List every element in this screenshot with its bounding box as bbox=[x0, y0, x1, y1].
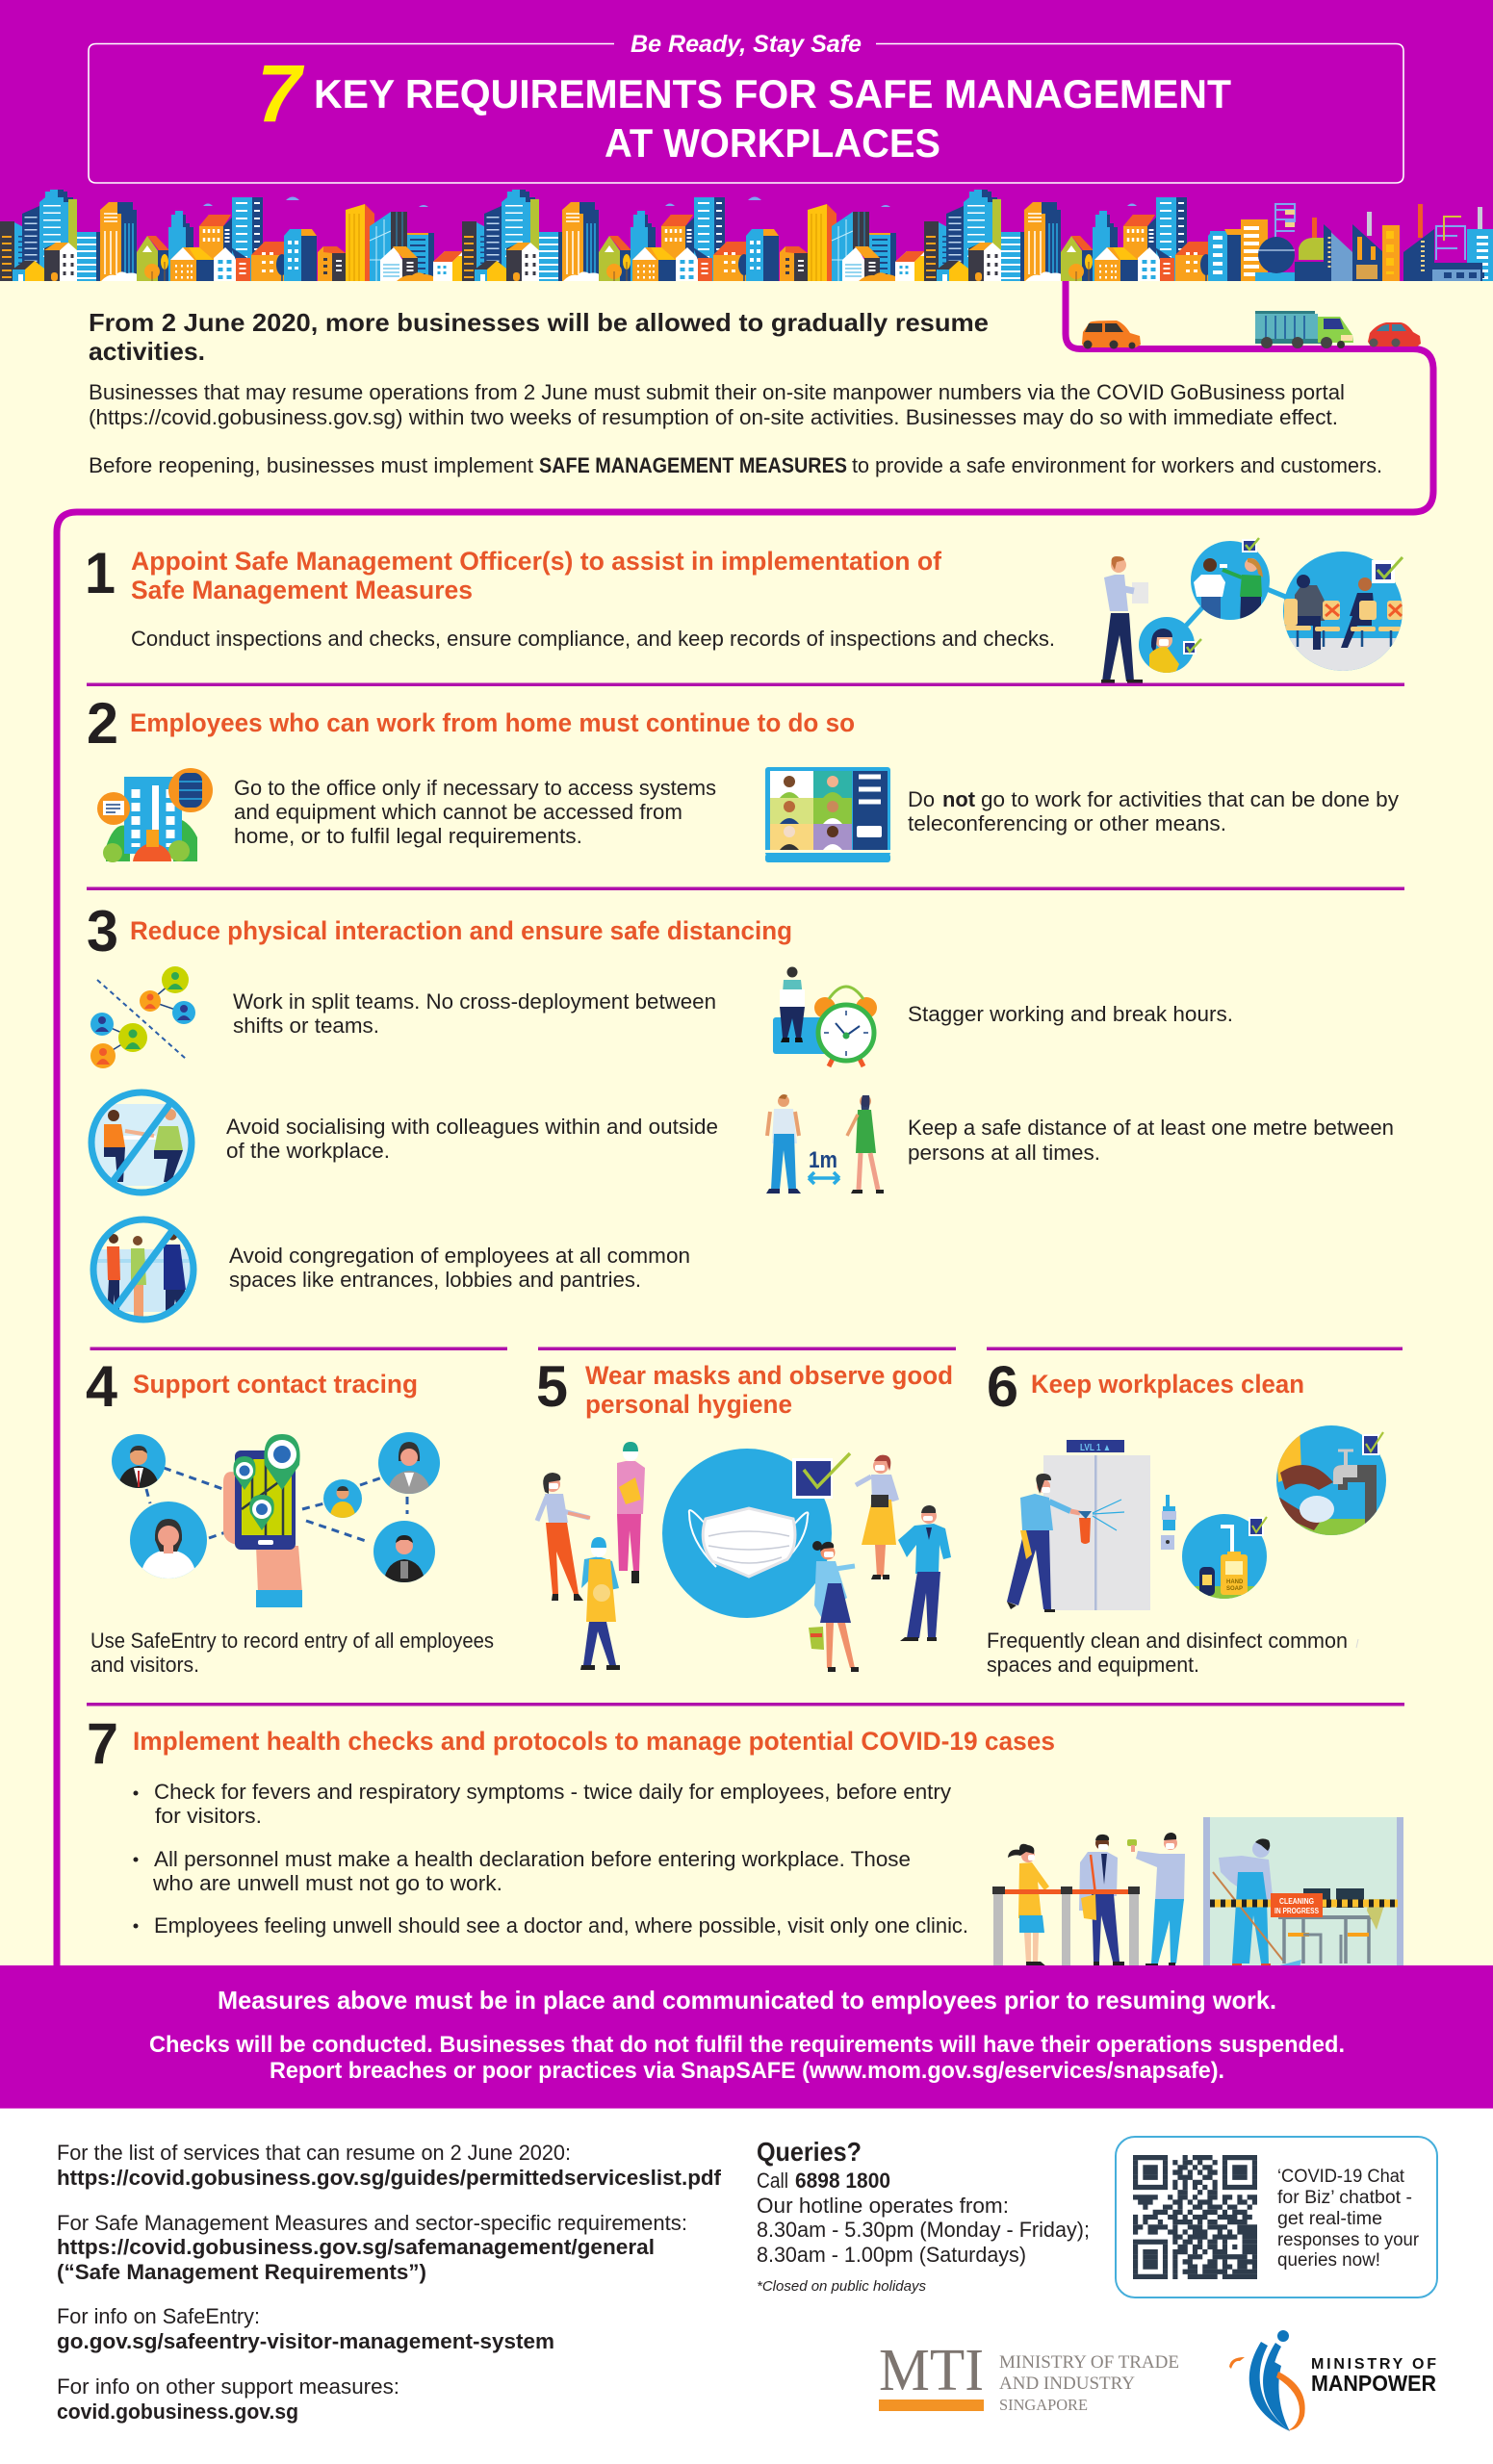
bullet list: for visitors. bbox=[155, 1804, 262, 1828]
intro text: SAFE MANAGEMENT MEASURES bbox=[539, 453, 847, 477]
person pink uniform bbox=[617, 1442, 645, 1583]
lift sign bbox=[1067, 1440, 1124, 1453]
body 2 right: Do bbox=[908, 787, 935, 811]
queries block: 8.30am - 5.30pm (Monday - Friday); bbox=[757, 2218, 1090, 2242]
truck bbox=[1255, 311, 1353, 348]
section 4: contact tracing bbox=[86, 1354, 494, 1677]
footer links: https://covid.gobusiness.gov.sg/guides/permittedserviceslist.pdf bbox=[57, 2166, 722, 2190]
body 3d: Keep a safe distance of at least one metre between bbox=[908, 1116, 1394, 1140]
section 3: safe distancing bbox=[87, 899, 1394, 1320]
illustration: mask and people bbox=[537, 1442, 951, 1672]
woman bbox=[847, 1095, 884, 1194]
red car bbox=[1368, 322, 1421, 346]
intro text: Businesses that may resume operations from 2 June must submit their on-site manpower numbers via the COVID GoBusiness portal bbox=[89, 380, 1345, 404]
logo: MTI: SINGAPORE bbox=[999, 2396, 1088, 2414]
logo: MTI: MINISTRY OF TRADE bbox=[999, 2352, 1179, 2373]
chatbot text: get real-time bbox=[1277, 2209, 1382, 2229]
section 7: health checks bbox=[87, 1711, 1403, 1969]
chatbot text: responses to your bbox=[1277, 2230, 1420, 2250]
orange van bbox=[1082, 321, 1141, 348]
closing banner bbox=[0, 1965, 1493, 2108]
body 2 left bbox=[234, 776, 716, 848]
cleaner bbox=[1007, 1474, 1080, 1612]
body 2 right: teleconferencing or other means. bbox=[908, 811, 1226, 835]
body 3b: Stagger working and break hours. bbox=[908, 1002, 1233, 1026]
icon: one metre distance bbox=[766, 1094, 884, 1194]
hand washing circle bbox=[1276, 1425, 1386, 1535]
logo: MTI bbox=[879, 2338, 1179, 2414]
person left bbox=[537, 1473, 590, 1601]
logo: Ministry of Manpower: MINISTRY OF bbox=[1311, 2356, 1436, 2373]
barrier posts bbox=[992, 1886, 1140, 1966]
body 2 right bbox=[908, 787, 1399, 835]
soap circle bbox=[1182, 1514, 1268, 1599]
bullet list: All personnel must make a health declaration before entering workplace. Those bbox=[154, 1847, 911, 1871]
man with bag bbox=[1079, 1835, 1124, 1965]
body 6: spaces and equipment. bbox=[987, 1653, 1199, 1677]
icon: qr code bbox=[1133, 2158, 1257, 2276]
number 7: 7 bbox=[87, 1711, 118, 1776]
section 6: clean workplaces bbox=[987, 1354, 1391, 1677]
heading 1: Safe Management Measures bbox=[131, 576, 473, 604]
cleaning room bbox=[1203, 1817, 1403, 1969]
title number 7: 7 bbox=[257, 48, 304, 139]
body 3e: Avoid congregation of employees at all common bbox=[229, 1244, 690, 1268]
footer links: For info on other support measures: bbox=[57, 2374, 399, 2399]
chatbot text bbox=[1277, 2167, 1420, 2271]
heading 1 bbox=[131, 547, 942, 604]
section 5 divider bbox=[538, 1348, 956, 1350]
banner line 1: Measures above must be in place and communicated to employees prior to resuming work. bbox=[218, 1986, 1276, 2015]
banner lines 2 and 3: Report breaches or poor practices via SnapSAFE (www.mom.gov.sg/eservices/snapsafe). bbox=[270, 2058, 1224, 2084]
person front with bag bbox=[809, 1541, 859, 1672]
heading 1: Appoint Safe Management Officer(s) to assist in implementation of bbox=[131, 547, 942, 576]
queries block: *Closed on public holidays bbox=[757, 2278, 926, 2295]
body 3c bbox=[226, 1115, 718, 1163]
logo: Ministry of Manpower bbox=[1229, 2330, 1436, 2431]
bullet list bbox=[133, 1780, 968, 1938]
heading 2: Employees who can work from home must continue to do so bbox=[130, 708, 855, 737]
illustration: queue and temperature check bbox=[992, 1817, 1403, 1969]
body 4: Use SafeEntry to record entry of all employees bbox=[90, 1629, 494, 1653]
heading 3: Reduce physical interaction and ensure safe distancing bbox=[130, 916, 792, 945]
heading 6: Keep workplaces clean bbox=[1031, 1370, 1304, 1399]
number 2: 2 bbox=[87, 691, 118, 756]
queries block bbox=[757, 2137, 1090, 2295]
spray bottle bbox=[1078, 1500, 1124, 1544]
intro heading: From 2 June 2020, more businesses will be allowed to gradually resume bbox=[89, 308, 989, 337]
number 4: 4 bbox=[86, 1354, 118, 1419]
section 6 divider bbox=[987, 1348, 1403, 1350]
title: KEY REQUIREMENTS FOR SAFE MANAGEMENT bbox=[314, 71, 1231, 116]
intro heading bbox=[89, 308, 989, 366]
heading 5: personal hygiene bbox=[585, 1390, 792, 1419]
body 2 left: and equipment which cannot be accessed from bbox=[234, 800, 682, 824]
cleaning sign bbox=[1271, 1893, 1323, 1917]
person suit right bbox=[898, 1505, 951, 1641]
icon: no socialising bbox=[89, 1092, 197, 1193]
section 4 divider bbox=[90, 1348, 507, 1350]
heading 4: Support contact tracing bbox=[133, 1370, 418, 1399]
body 2 left: Go to the office only if necessary to access systems bbox=[234, 776, 716, 800]
queries block: Queries? bbox=[757, 2137, 862, 2167]
logo: MTI: MTI bbox=[879, 2338, 984, 2403]
heading 7: Implement health checks and protocols to manage potential COVID-19 cases bbox=[133, 1727, 1055, 1756]
chatbot box bbox=[1116, 2137, 1437, 2297]
footer links: (“Safe Management Requirements”) bbox=[57, 2260, 426, 2284]
number 3: 3 bbox=[87, 899, 118, 963]
intro text bbox=[89, 380, 1382, 477]
title frame bbox=[89, 44, 1403, 183]
number 5: 5 bbox=[536, 1354, 568, 1419]
man with thermometer bbox=[1127, 1833, 1185, 1966]
body 2 right: not bbox=[942, 787, 976, 811]
icon: no congregation bbox=[89, 1219, 197, 1320]
chatbot text: for Biz’ chatbot - bbox=[1277, 2188, 1412, 2208]
divider 1 bbox=[87, 683, 1404, 686]
body 3a bbox=[233, 989, 716, 1038]
person skirt right bbox=[856, 1455, 899, 1579]
footer links: For Safe Management Measures and sector-specific requirements: bbox=[57, 2211, 687, 2235]
cleaning sign: IN PROGRESS bbox=[1274, 1907, 1320, 1915]
body 3e bbox=[229, 1244, 690, 1292]
footer links: For the list of services that can resume on 2 June 2020: bbox=[57, 2141, 571, 2165]
bullet list: Employees feeling unwell should see a doctor and, where possible, visit only one clinic. bbox=[154, 1913, 968, 1938]
intro text: to provide a safe environment for workers and customers. bbox=[852, 453, 1382, 477]
illustration: officer inspecting bbox=[1101, 538, 1405, 684]
icon: video conference laptop bbox=[765, 767, 890, 862]
hand holding phone bbox=[223, 1434, 302, 1607]
icon: worker and alarm clock bbox=[773, 966, 877, 1066]
arrow bbox=[809, 1172, 839, 1184]
banner lines 2 and 3 bbox=[149, 2032, 1345, 2084]
body 6: Frequently clean and disinfect common bbox=[987, 1629, 1348, 1653]
body 6 bbox=[987, 1629, 1358, 1677]
soap circle: SOAP bbox=[1226, 1586, 1243, 1592]
heading 5 bbox=[585, 1361, 953, 1419]
heading 5: Wear masks and observe good bbox=[585, 1361, 953, 1390]
label 1m: 1m bbox=[809, 1147, 837, 1173]
intro text: Before reopening, businesses must implement bbox=[89, 453, 533, 477]
body 4 bbox=[90, 1629, 494, 1677]
banner lines 2 and 3: Checks will be conducted. Businesses that do not fulfil the requirements will have their operations suspended. bbox=[149, 2032, 1345, 2058]
divider 3 bbox=[87, 1703, 1404, 1706]
body 3e: spaces like entrances, lobbies and pantries. bbox=[229, 1268, 641, 1292]
body 2 right: go to work for activities that can be done by bbox=[981, 787, 1399, 811]
number 6: 6 bbox=[987, 1354, 1018, 1419]
man bbox=[766, 1094, 801, 1194]
footer links bbox=[57, 2141, 722, 2424]
body 3c: Avoid socialising with colleagues within and outside bbox=[226, 1115, 718, 1139]
chatbot text: ‘COVID-19 Chat bbox=[1277, 2167, 1405, 2187]
magenta road line bbox=[57, 281, 1433, 1965]
divider 2 bbox=[87, 887, 1404, 890]
section 5: masks bbox=[536, 1354, 953, 1672]
logo: MTI: AND INDUSTRY bbox=[999, 2374, 1135, 2394]
illustration: contact tracing network bbox=[112, 1432, 440, 1607]
check box bbox=[792, 1453, 850, 1499]
title bbox=[314, 71, 1231, 166]
lift door bbox=[1043, 1455, 1150, 1610]
logo: Ministry of Manpower: MANPOWER bbox=[1311, 2371, 1436, 2396]
body 3a: Work in split teams. No cross-deployment between bbox=[233, 989, 716, 1014]
body 3d bbox=[908, 1116, 1394, 1165]
vehicles on road bbox=[1082, 311, 1421, 348]
queries block: 6898 1800 bbox=[795, 2169, 890, 2193]
bullet list: Check for fevers and respiratory symptoms - twice daily for employees, before entry bbox=[154, 1780, 951, 1804]
body 3a: shifts or teams. bbox=[233, 1014, 379, 1038]
body 4: and visitors. bbox=[90, 1653, 199, 1677]
body 2 left: home, or to fulfil legal requirements. bbox=[234, 824, 582, 848]
person apron bbox=[580, 1537, 620, 1670]
section 2: work from home bbox=[87, 691, 1399, 862]
section 1: safe management officer bbox=[85, 538, 1405, 684]
body 3c: of the workplace. bbox=[226, 1139, 390, 1163]
number 1: 1 bbox=[85, 541, 116, 605]
body 1: Conduct inspections and checks, ensure compliance, and keep records of inspections and checks. bbox=[131, 627, 1055, 651]
bullet list: who are unwell must not go to work. bbox=[152, 1871, 502, 1895]
queries block: 8.30am - 1.00pm (Saturdays) bbox=[757, 2243, 1026, 2267]
woman in queue bbox=[1008, 1844, 1049, 1966]
footer links: covid.gobusiness.gov.sg bbox=[57, 2400, 298, 2424]
face mask bbox=[689, 1508, 808, 1577]
footer links: https://covid.gobusiness.gov.sg/safemanagement/general bbox=[57, 2235, 655, 2259]
body 3d: persons at all times. bbox=[908, 1141, 1100, 1165]
cleaning sign: CLEANING bbox=[1279, 1897, 1314, 1906]
queries block: Call bbox=[757, 2169, 788, 2193]
queries block: Our hotline operates from: bbox=[757, 2194, 1009, 2218]
footer links: go.gov.sg/safeentry-visitor-management-system bbox=[57, 2329, 554, 2353]
intro heading: activities. bbox=[89, 337, 205, 366]
title: AT WORKPLACES bbox=[605, 120, 940, 166]
city skyline banner bbox=[0, 190, 1493, 281]
soap circle: HAND bbox=[1226, 1579, 1244, 1585]
footer links: For info on SafeEntry: bbox=[57, 2304, 260, 2328]
icon: split teams network bbox=[90, 966, 195, 1068]
industrial skyline bbox=[1210, 204, 1493, 281]
header band bbox=[0, 0, 1493, 281]
tagline: Be Ready, Stay Safe bbox=[631, 31, 862, 58]
chatbot text: queries now! bbox=[1277, 2250, 1380, 2271]
illustration: cleaning lift bbox=[1007, 1423, 1391, 1612]
lift sign: LVL 1 ▲ bbox=[1080, 1443, 1111, 1453]
wall dispenser bbox=[1161, 1495, 1176, 1550]
icon: office building bbox=[97, 768, 213, 862]
intro text: (https://covid.gobusiness.gov.sg) within two weeks of resumption of on-site activities. Businesses may do so with immediate effect. bbox=[89, 405, 1338, 429]
